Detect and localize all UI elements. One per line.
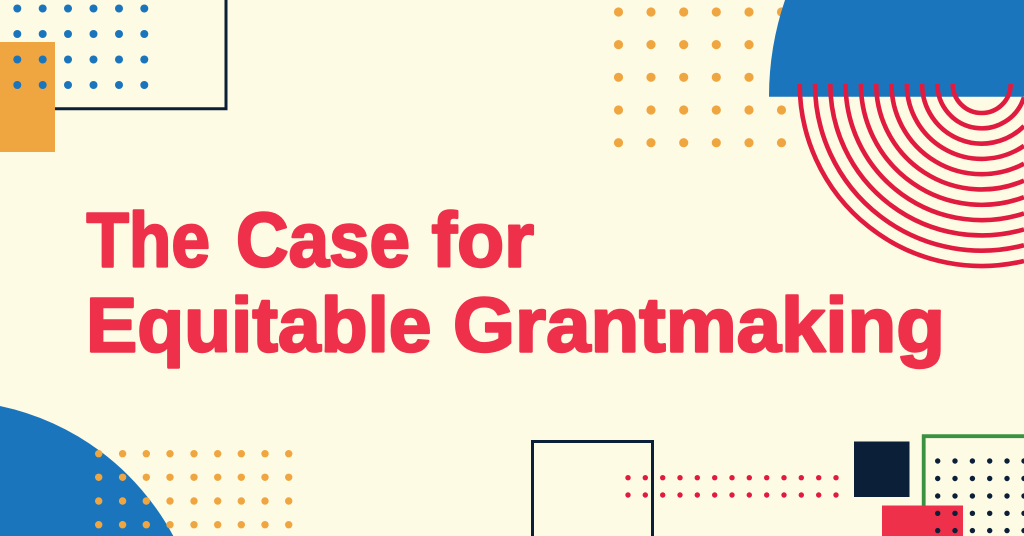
bottom-right red block — [882, 506, 963, 536]
top-left blue dot grid — [13, 4, 148, 89]
bottom-right black dot grid — [935, 458, 1024, 533]
title: The — [86, 198, 210, 284]
bottom-left orange dot grid — [95, 450, 292, 528]
title: Grantmaking — [453, 283, 945, 369]
bottom-centre red dot rows — [625, 475, 839, 498]
top-right blue half circle — [769, 0, 1024, 97]
title — [86, 198, 945, 369]
bottom-left blue circle — [0, 406, 173, 536]
top-left navy outlined rectangle — [0, 0, 226, 109]
title: Equitable — [86, 283, 432, 369]
title: Case — [236, 198, 410, 284]
top-right red concentric arcs — [800, 84, 1024, 266]
bottom-right green outlined rectangle — [924, 436, 1024, 536]
top-left orange block — [0, 42, 55, 152]
top-right orange dot grid — [614, 7, 786, 147]
title: for — [432, 198, 534, 284]
bottom-centre navy outlined rectangle — [532, 442, 652, 536]
bottom-right navy square — [854, 442, 910, 497]
